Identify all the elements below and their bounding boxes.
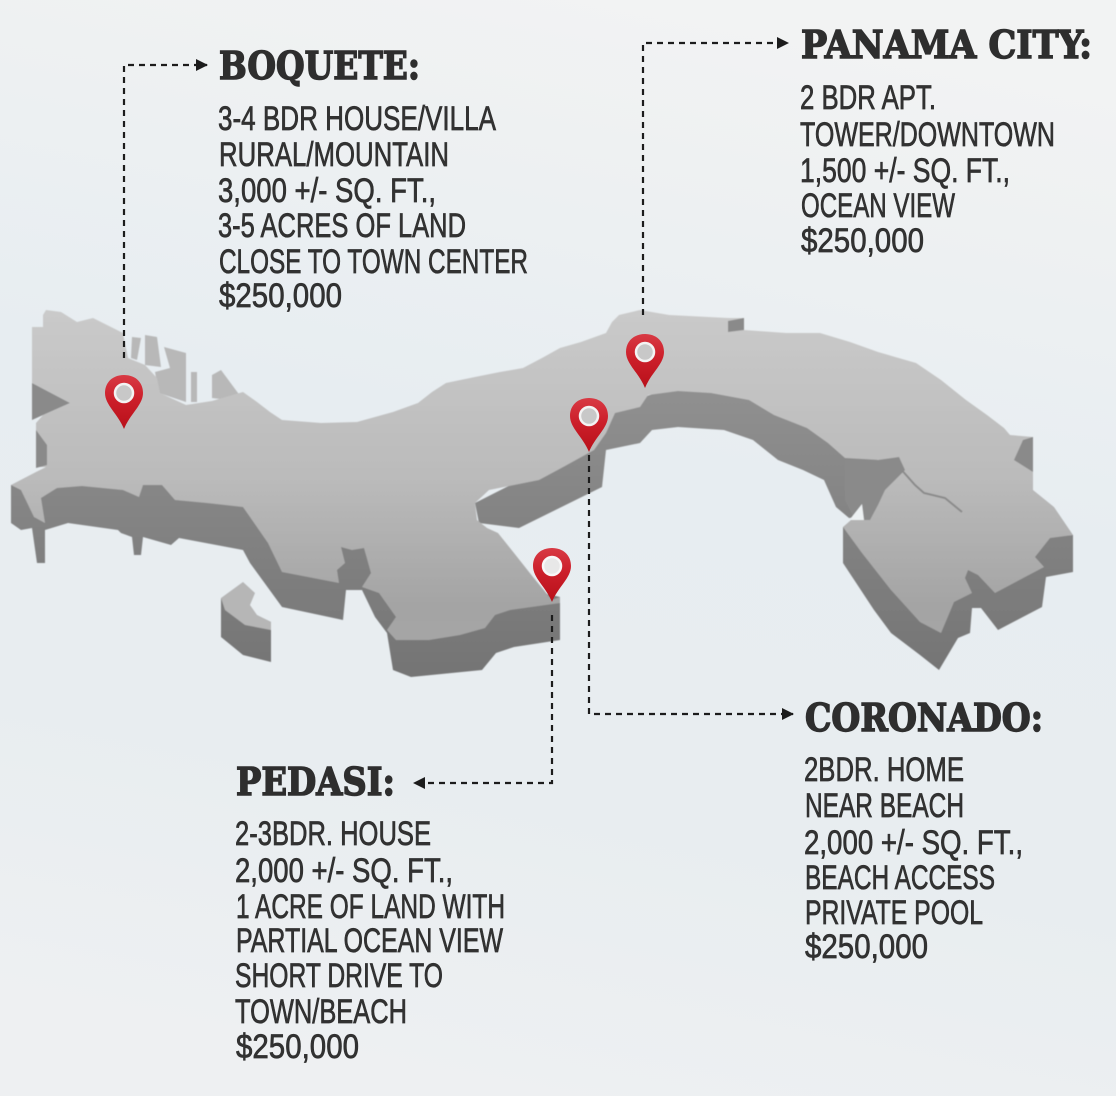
text block: Pedasi details: SHORT DRIVE TO [235,957,443,995]
panel: Pedasi [235,759,505,1066]
text block: Pedasi details: 2-3BDR. HOUSE [235,815,431,853]
text block: Pedasi details: 1 ACRE OF LAND WITH [236,888,505,926]
island: Coiba [221,582,271,630]
text block: Pedasi details: $250,000 [236,1028,359,1066]
dashed connector: Panama City [643,43,788,315]
map extruded sides [11,385,1073,677]
pin: Panama City [626,334,664,388]
text block: Coronado details: PRIVATE POOL [805,894,983,932]
text block: Boquete details: CLOSE TO TOWN CENTER [219,243,528,281]
pin: Pedasi [533,548,571,602]
map river [899,467,962,512]
pin: Boquete [105,375,143,429]
text block: Boquete details: 3-5 ACRES OF LAND [218,207,466,245]
text block: Coronado details: BEACH ACCESS [805,859,995,897]
map top surface [11,310,1073,640]
text block: Coronado details: NEAR BEACH [805,787,964,825]
text block: Boquete details: 3,000 +/- SQ. FT., [218,172,436,210]
map inland dark details [32,318,1033,520]
dashed connector: Coronado [589,455,793,714]
text block: Coronado details: 2,000 +/- SQ. FT., [804,824,1023,862]
text block: Boquete details [218,100,528,315]
text block: Panama City details: 1,500 +/- SQ. FT., [800,152,1010,190]
text block: Coronado details: 2BDR. HOME [804,751,964,789]
text block: Panama City details: 2 BDR APT. [800,79,936,117]
dashed connector: Boquete [124,65,207,358]
text block: Pedasi details: TOWN/BEACH [235,993,407,1031]
text block: Panama City details: $250,000 [801,222,924,260]
heading: Panama City: PANAMA CITY: [801,22,1092,67]
map of Panama [11,310,1073,677]
pin: Coronado [570,398,608,452]
dashed connector: Pedasi [414,615,552,783]
text block: Coronado details: $250,000 [805,928,928,966]
text block: Panama City details: OCEAN VIEW [801,187,955,225]
text block: Coronado details [804,751,1023,966]
text block: Boquete details: RURAL/MOUNTAIN [219,136,449,174]
panel: Panama City [800,22,1092,260]
text block: Boquete details: $250,000 [219,277,342,315]
panel: Coronado [804,695,1043,966]
text block: Panama City details [800,79,1055,260]
lake gap [851,504,864,520]
text block: Pedasi details [235,815,505,1066]
heading: Boquete: BOQUETE: [219,43,420,88]
heading: Coronado: CORONADO: [805,695,1043,740]
text block: Boquete details: 3-4 BDR HOUSE/VILLA [218,100,496,138]
text block: Pedasi details: PARTIAL OCEAN VIEW [236,922,503,960]
text block: Pedasi details: 2,000 +/- SQ. FT., [235,852,453,890]
panel: Boquete [218,43,528,315]
map islets [131,335,241,402]
heading: Pedasi: PEDASI: [236,759,395,804]
